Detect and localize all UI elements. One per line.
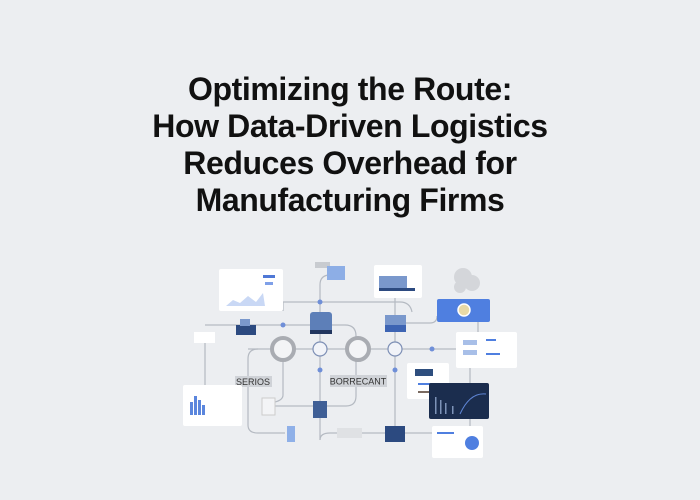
title: Reduces Overhead for <box>183 145 517 181</box>
labels <box>235 375 387 387</box>
bottom right card <box>432 426 483 458</box>
labels: SERIOS <box>236 377 270 387</box>
small card <box>407 363 449 399</box>
misc bottom icons <box>262 398 405 442</box>
right ship <box>385 315 406 332</box>
ship icon <box>236 319 256 335</box>
blue card <box>437 299 490 322</box>
labels: BORRECANT <box>330 376 387 386</box>
node dots <box>280 300 434 372</box>
title: How Data-Driven Logistics <box>152 108 548 144</box>
card: city <box>374 265 422 298</box>
left bar chart card <box>183 385 242 426</box>
bottom building <box>313 401 327 418</box>
buildings top <box>315 262 345 280</box>
title <box>152 71 548 218</box>
title: Optimizing the Route: <box>188 71 512 107</box>
dark chart card <box>429 383 489 419</box>
title: Manufacturing Firms <box>196 182 504 218</box>
hub circles <box>272 338 402 360</box>
cloud map <box>454 268 480 293</box>
card: area chart <box>219 269 283 311</box>
right card <box>456 332 517 368</box>
left small label <box>194 332 215 343</box>
central building <box>310 312 332 334</box>
